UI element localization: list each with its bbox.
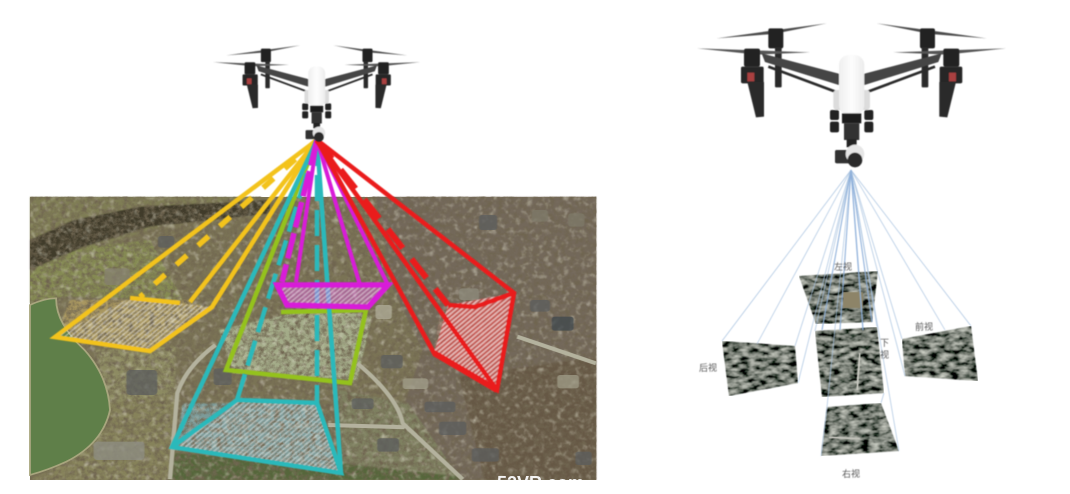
label: left view: 左视 xyxy=(834,261,852,272)
footprint: lime green xyxy=(226,140,366,383)
photo: left view xyxy=(799,271,878,324)
label: down view second character: 视 xyxy=(880,349,889,360)
footprint: yellow xyxy=(53,140,317,351)
photo: front view xyxy=(902,326,978,381)
photo: right view xyxy=(821,403,899,456)
icon: drone (left) xyxy=(213,45,420,142)
panel: five-camera oblique diagram xyxy=(697,23,1006,479)
label: front view: 前视 xyxy=(915,321,933,332)
watermark: 52VR.com xyxy=(497,473,584,493)
lake xyxy=(30,298,110,475)
label: right view: 右视 xyxy=(842,468,860,479)
label: down view: 下 xyxy=(880,338,889,348)
footprint: red xyxy=(317,140,514,390)
photo: nadir view xyxy=(815,327,884,397)
photo: back view xyxy=(722,341,798,396)
camera sight lines xyxy=(722,170,971,456)
footprint: magenta xyxy=(277,140,388,307)
panel: aerial photo with colored camera footprints xyxy=(0,45,600,494)
label: back view: 后视 xyxy=(699,362,717,373)
icon: drone (right) xyxy=(697,23,1006,167)
aerial photograph xyxy=(30,197,596,480)
footprint: cyan xyxy=(172,140,341,473)
